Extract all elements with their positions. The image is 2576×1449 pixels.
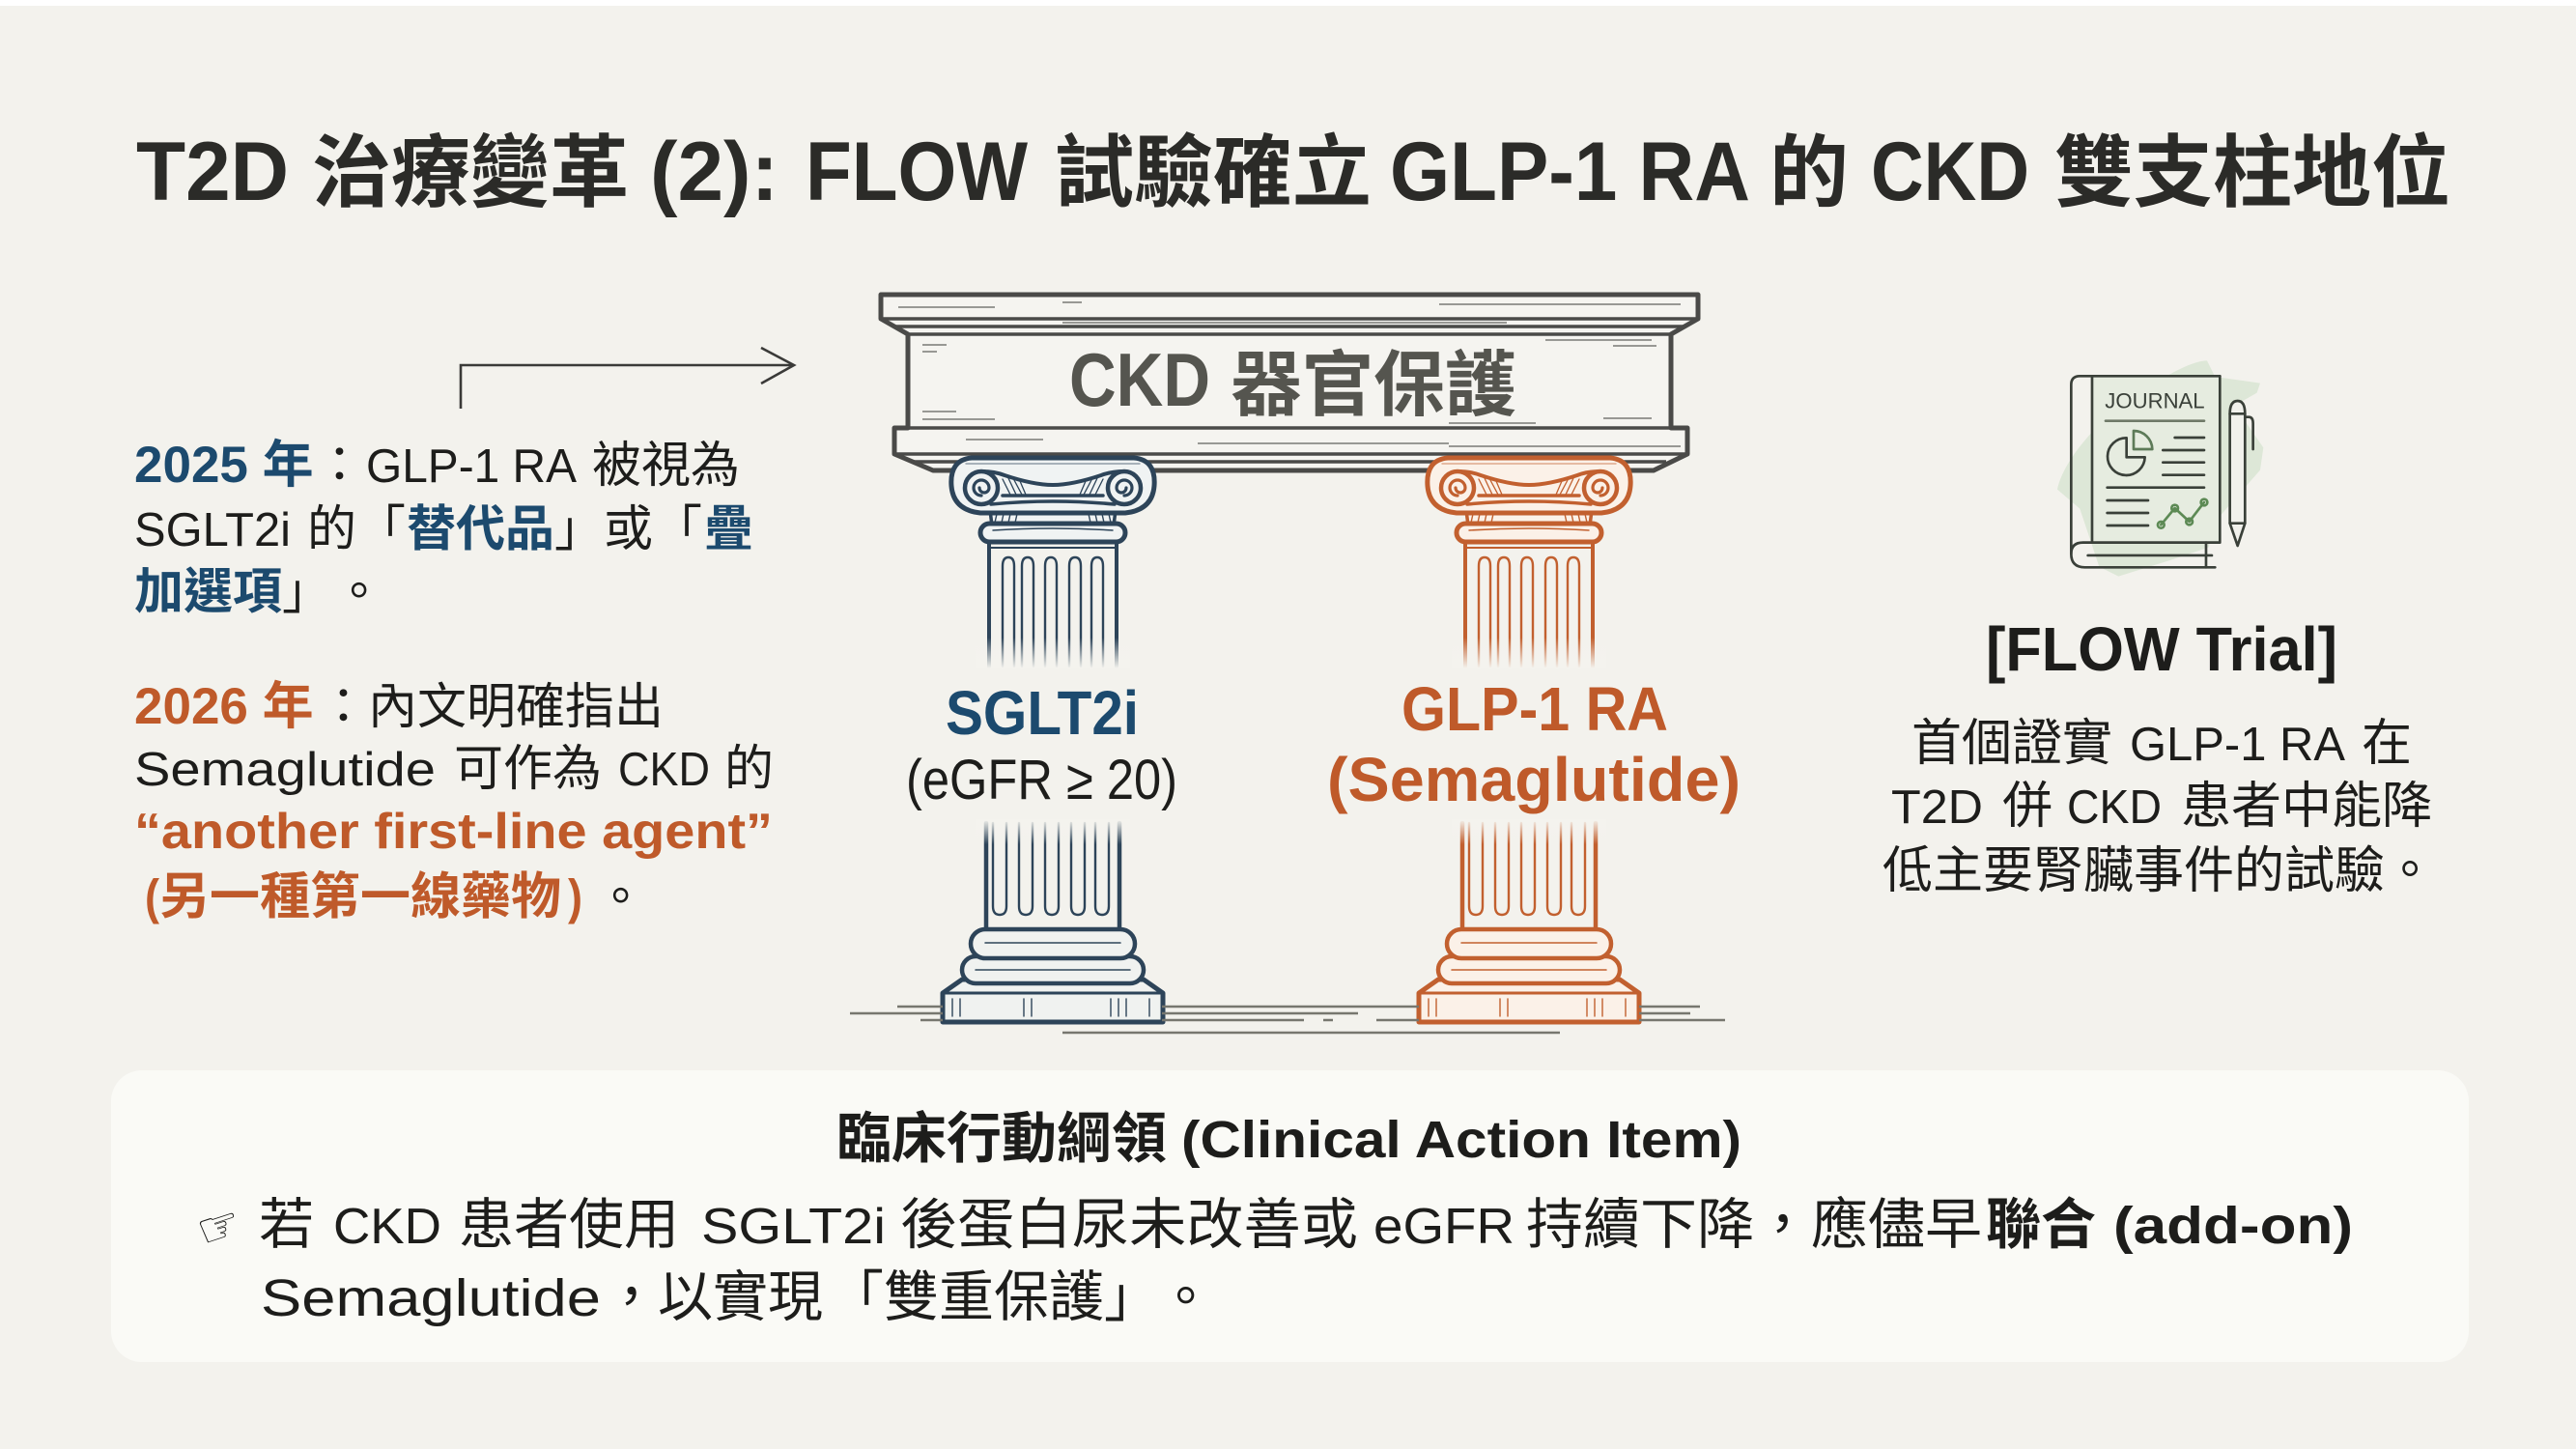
text block: FLOW Trial description [1882,716,2435,899]
text block: FLOW Trial description: 低主要腎臟事件的試驗。 [1882,843,2435,899]
label: eGFR: (eGFR ≥ 20) [906,749,1177,811]
action text line 1: 聯合 [1986,1194,2096,1256]
action text line 1: eGFR [1373,1199,1514,1255]
text block: 2025 [134,437,753,619]
label: CKD 器官保護: CKD [1069,337,1210,422]
label: CKD 器官保護: 器官保護 [1231,345,1516,425]
title: 試驗確立 [1055,129,1372,217]
title: 治療變革 [312,129,629,217]
text block: 2025: 加選項 [134,564,282,619]
text block: 2025: 」 [282,564,331,619]
text block: 2026: Semaglutide [134,744,436,796]
title: CKD [1871,126,2029,218]
heading: FLOW Trial: [FLOW Trial] [1986,614,2337,684]
text block: 2026: CKD [618,744,710,796]
ground lines [850,1007,1725,1033]
panel: clinical action item [111,1070,2469,1362]
action text line 1: 若 [259,1194,314,1256]
text block: 2025: 被視為 [592,438,740,493]
text block: 2025: GLP-1 RA [366,440,577,493]
icon: pointing hand: ☞ [190,1194,248,1261]
text block: 2025: 疊 [704,501,753,556]
title: FLOW [806,126,1029,218]
text block: FLOW Trial description: 在 [2362,716,2412,772]
text block: 2026: ( [145,869,159,924]
title: T2D [136,126,289,218]
action text line 2: Semaglutide [261,1269,601,1327]
label: GLP-1 RA: GLP-1 RA [1401,674,1668,744]
text block: FLOW Trial description: 併 [2002,779,2052,835]
panel heading: (Clinical Action Item) [1181,1111,1741,1169]
icon: journal [2057,360,2263,577]
text block: 2025: 2025 年 [134,437,314,494]
text block: 2026: 可作為 [454,741,602,796]
label: JOURNAL: JOURNAL [2105,388,2205,412]
title: GLP-1 RA [1390,126,1750,218]
label: Semaglutide: (Semaglutide) [1327,745,1741,814]
text block: 2026 [134,678,774,925]
text block: 2025: 。 [334,564,383,619]
action text line 1: SGLT2i [701,1199,886,1255]
action text line 2: 雙重保護 [884,1266,1104,1328]
action text line 1: (add-on) [2113,1197,2353,1255]
text block: 2025: ： [315,438,364,493]
action text line 2: 「 [829,1266,884,1328]
panel heading: 臨床行動綱領 [836,1108,1167,1170]
title: (2): [650,126,778,218]
text block: 2026: ) [568,869,582,924]
text block: FLOW Trial description: CKD [2067,781,2162,834]
text block: FLOW Trial description: T2D [1891,781,1983,834]
action text line 1: 持續下降，應儘早 [1526,1194,1982,1256]
pillar: SGLT2i [906,458,1177,1022]
action text line 2: ， [604,1266,659,1328]
text block: FLOW Trial description: 患者中能降 [2181,779,2432,835]
action text line 2: 以實現 [658,1266,823,1328]
label: SGLT2i: SGLT2i [946,678,1139,748]
action text line 1: 患者使用 [459,1194,679,1256]
text block: 2026: 2026 年 [134,678,314,735]
text block: 2025: 替代品 [407,501,554,556]
action text line 2: 」 [1104,1266,1159,1328]
text block: 2026: “another first-line agent” [134,804,773,860]
text block: 2025: SGLT2i [134,504,291,556]
text block: 2026: 另一種第一線藥物 [159,869,561,925]
entablature: CKD 器官保護 [881,295,1698,470]
text block: FLOW Trial description: GLP-1 RA [2130,719,2345,771]
arrow: timeline to pillars [461,348,794,409]
action text line 2: 。 [1158,1266,1213,1328]
text block: 2025: 的「 [307,501,406,556]
text block: 2026: 。 [596,869,645,924]
action text line 1: CKD [333,1199,441,1255]
title: 雙支柱地位 [2054,129,2450,217]
title: 的 [1769,129,1849,217]
text block: 2025: 」或「 [554,501,702,556]
text block: 2026: ：內文明確指出 [319,679,664,734]
action text line 1: 後蛋白尿未改善或 [900,1194,1358,1256]
text block: FLOW Trial description: 首個證實 [1911,716,2112,772]
text block: 2026: 的 [724,741,774,796]
pillar: GLP-1 RA [1327,458,1741,1022]
